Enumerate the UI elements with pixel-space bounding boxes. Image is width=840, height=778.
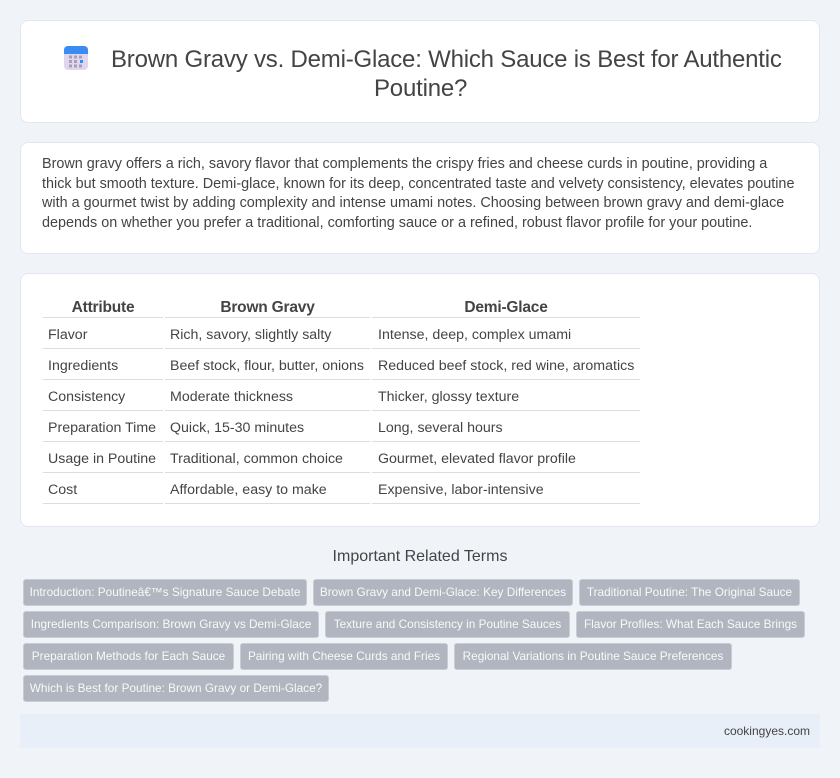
footer text: cookingyes.com xyxy=(724,724,810,738)
text block: introduction: depends on whether you prefer a traditional, comforting sauce or a refined, robust flavor profile for your poutine. xyxy=(42,214,752,230)
table header xyxy=(43,299,640,318)
text block: introduction: thick but smooth texture. Demi-glace, known for its deep, concentrated taste and velvety consistency, elevates poutine xyxy=(42,176,794,192)
tag: Introduction: Poutineâ€™s Signature Sauce Debate xyxy=(30,585,300,599)
tag xyxy=(23,579,307,606)
tag: Traditional Poutine: The Original Sauce xyxy=(587,585,792,599)
icon: calendar xyxy=(64,46,88,70)
tag xyxy=(313,579,573,606)
row: usage in poutine: Traditional, common choice xyxy=(170,451,343,467)
tag xyxy=(240,643,448,670)
row: preparation time: Quick, 15-30 minutes xyxy=(170,420,304,436)
row: flavor: Intense, deep, complex umami xyxy=(378,327,571,343)
heading: Brown Gravy vs. Demi-Glace: Which Sauce is Best for Authentic xyxy=(111,46,782,73)
row: ingredients: Beef stock, flour, butter, onions xyxy=(170,358,364,374)
footer bar xyxy=(20,714,820,748)
table: comparison xyxy=(43,299,640,504)
tag: Texture and Consistency in Poutine Sauces xyxy=(334,617,561,631)
tag: Flavor Profiles: What Each Sauce Brings xyxy=(584,617,797,631)
tag: Regional Variations in Poutine Sauce Preferences xyxy=(463,649,723,663)
panel: title xyxy=(20,20,820,123)
row: consistency xyxy=(43,389,640,411)
row: flavor xyxy=(43,327,640,349)
row: ingredients: Reduced beef stock, red wine, aromatics xyxy=(378,358,634,374)
row: preparation time xyxy=(43,420,640,442)
row: flavor: Flavor xyxy=(48,327,87,343)
tag xyxy=(454,643,732,670)
tag: Pairing with Cheese Curds and Fries xyxy=(248,649,440,663)
table header: Brown Gravy xyxy=(220,299,315,316)
tag xyxy=(325,611,570,638)
tag: Brown Gravy and Demi-Glace: Key Differences xyxy=(320,585,566,599)
row: usage in poutine: Gourmet, elevated flavor profile xyxy=(378,451,576,467)
tag xyxy=(576,611,805,638)
text block: introduction: Brown gravy offers a rich, savory flavor that complements the crispy fries and cheese curds in poutine, providing a xyxy=(42,156,767,172)
tag xyxy=(23,643,234,670)
tag: Preparation Methods for Each Sauce xyxy=(32,649,225,663)
tag list xyxy=(23,579,805,702)
row: consistency: Thicker, glossy texture xyxy=(378,389,519,405)
heading: Poutine? xyxy=(374,75,467,102)
table header: Attribute xyxy=(72,299,134,316)
row: ingredients xyxy=(43,358,640,380)
row: usage in poutine: Usage in Poutine xyxy=(48,451,156,467)
row: cost xyxy=(43,482,640,504)
row: cost: Expensive, labor-intensive xyxy=(378,482,544,498)
row: preparation time: Preparation Time xyxy=(48,420,156,436)
row: ingredients: Ingredients xyxy=(48,358,118,374)
text block: introduction: with a gourmet twist by adding complexity and intense umami notes. Choosing between brown gravy and demi-glace xyxy=(42,195,784,211)
heading: related terms: Important Related Terms xyxy=(333,548,507,565)
row: consistency: Moderate thickness xyxy=(170,389,293,405)
heading xyxy=(111,46,782,102)
panel: comparison table xyxy=(20,273,820,527)
tag: Which is Best for Poutine: Brown Gravy or Demi-Glace? xyxy=(30,681,322,695)
tag xyxy=(579,579,800,606)
row: flavor: Rich, savory, slightly salty xyxy=(170,327,331,343)
panel: intro text xyxy=(20,142,820,254)
table header: Demi-Glace xyxy=(464,299,548,316)
tag xyxy=(23,675,329,702)
row: cost: Affordable, easy to make xyxy=(170,482,327,498)
tag xyxy=(23,611,319,638)
row: cost: Cost xyxy=(48,482,77,498)
row: preparation time: Long, several hours xyxy=(378,420,503,436)
row: consistency: Consistency xyxy=(48,389,125,405)
row: usage in poutine xyxy=(43,451,640,473)
tag: Ingredients Comparison: Brown Gravy vs Demi-Glace xyxy=(31,617,311,631)
text block: introduction xyxy=(42,156,794,230)
